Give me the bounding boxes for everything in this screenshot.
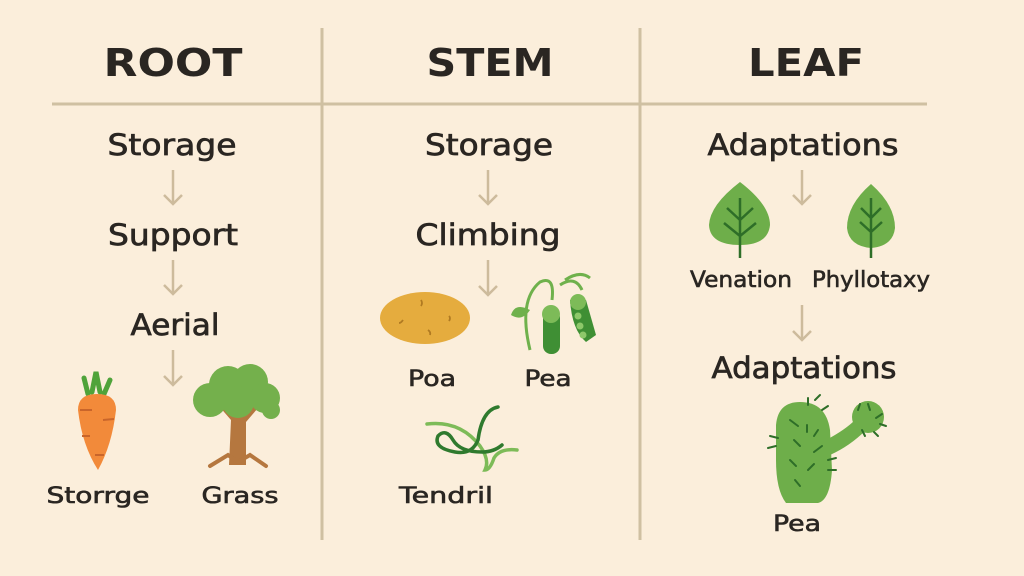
icon: carrot <box>78 372 116 470</box>
label: Grass: Grass <box>202 484 278 509</box>
arrow <box>164 350 182 385</box>
text: Climbing: Climbing <box>416 218 560 252</box>
arrow <box>164 260 182 294</box>
text: Storage: Storage <box>108 128 236 162</box>
arrow <box>479 170 497 204</box>
text: Storage: Storage <box>425 128 553 162</box>
text: Support: Support <box>108 218 238 252</box>
label: Storrge: Storrge <box>46 484 150 509</box>
label: Poa: Poa <box>408 367 456 392</box>
icon: cactus <box>768 395 886 503</box>
heading: STEM: STEM <box>426 41 554 85</box>
text: Aerial: Aerial <box>130 308 220 342</box>
label: Phyllotaxy: Phyllotaxy <box>812 268 930 293</box>
label: Tendril: Tendril <box>398 484 493 509</box>
panel: leaf <box>690 128 930 537</box>
icon: pea plant <box>511 274 596 354</box>
panel: root <box>46 128 280 509</box>
panel: stem <box>380 128 596 509</box>
arrow <box>479 260 497 295</box>
arrow <box>793 170 811 204</box>
icon: leaf venation <box>709 182 770 258</box>
icon: tree <box>193 364 280 466</box>
text: Adaptations: Adaptations <box>708 128 898 162</box>
arrow <box>164 170 182 204</box>
label: Pea: Pea <box>524 367 572 392</box>
text: Adaptations: Adaptations <box>712 351 896 385</box>
icon: potato <box>380 292 470 344</box>
heading: LEAF: LEAF <box>748 41 864 85</box>
arrow <box>793 305 811 340</box>
heading: ROOT: ROOT <box>104 41 243 85</box>
label: Venation: Venation <box>690 268 792 293</box>
icon: tendril <box>427 407 517 470</box>
label: Pea: Pea <box>773 512 821 537</box>
icon: leaf phyllotaxy <box>847 184 895 258</box>
